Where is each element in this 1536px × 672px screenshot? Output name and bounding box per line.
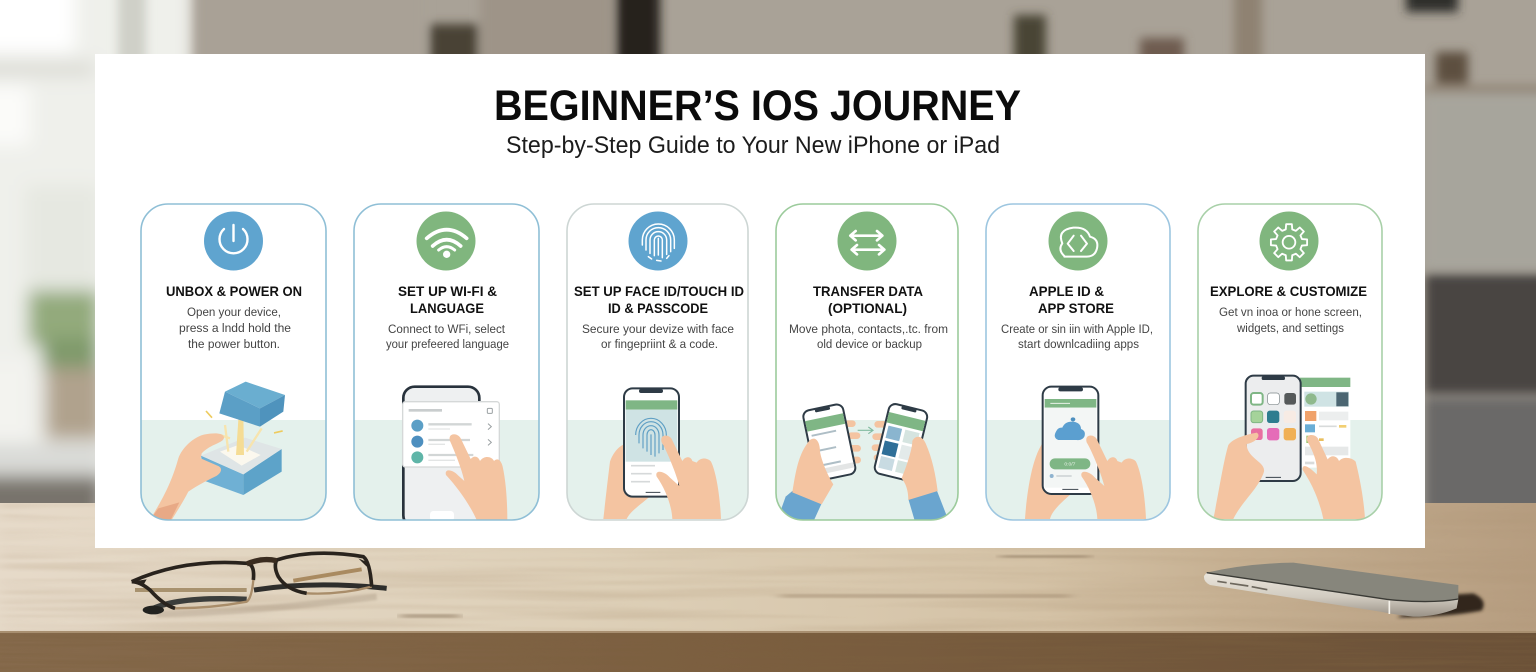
panel: step 3 face id and passcode xyxy=(567,204,748,520)
text: step 4 description xyxy=(789,322,948,351)
subtitle: Step-by-Step Guide to Your New iPhone or iPad xyxy=(506,132,1000,159)
icon: apple id cloud xyxy=(1048,212,1108,270)
panel: white guide board xyxy=(95,54,1425,548)
text: step 5 description: start downlcadiing apps xyxy=(1018,337,1139,351)
icon: smartphone lying on table xyxy=(1204,563,1484,617)
text: step 1 description: the power button. xyxy=(188,337,280,351)
heading: step 3 xyxy=(574,283,744,316)
text: step 2 description: Connect to WFi, select xyxy=(388,322,506,336)
icon: wi-fi xyxy=(416,212,476,270)
illustration: home screen and widgets xyxy=(1213,376,1365,519)
text: step 4 description: old device or backup xyxy=(817,337,922,351)
title: BEGINNER’S IOS JOURNEY xyxy=(494,82,1021,130)
heading: step 2 xyxy=(398,283,497,316)
icon: power xyxy=(204,212,263,270)
icon: eyeglasses on table xyxy=(132,553,387,614)
illustration: opening a box xyxy=(151,382,285,520)
text: step 6 description: widgets, and settings xyxy=(1236,321,1344,335)
heading: step 5: APP STORE xyxy=(1038,300,1114,316)
text: step 3 description: Secure your devize with face xyxy=(582,322,734,336)
text: step 5 description: Create or sin iin with Apple ID, xyxy=(1001,322,1153,336)
heading: step 5 xyxy=(1029,283,1114,316)
text: step 1 description xyxy=(179,305,291,351)
text: step 1 description: Open your device, xyxy=(187,305,281,319)
illustration: fingerprint on phone xyxy=(603,388,721,519)
text: step 6 description: Get vn inoa or hone screen, xyxy=(1219,305,1362,319)
panel: step 4 transfer data xyxy=(776,204,958,522)
text: step 3 description: or fingepriint & a code. xyxy=(601,337,718,351)
text: step 3 description xyxy=(582,322,734,351)
wooden table top xyxy=(0,503,1536,633)
heading: step 5: APPLE ID & xyxy=(1029,283,1104,299)
illustration: phone settings list xyxy=(403,387,507,527)
illustration: apple id sign in on phone: 0:0/7 xyxy=(1064,462,1076,468)
illustration: two phones transferring xyxy=(777,403,949,522)
heading: step 3: SET UP FACE ID/TOUCH ID xyxy=(574,283,744,299)
icon: transfer arrows xyxy=(838,212,896,270)
heading: step 6: EXPLORE & CUSTOMIZE xyxy=(1210,283,1367,299)
text: step 1 description: press a lndd hold the xyxy=(179,321,291,335)
icon: fingerprint xyxy=(628,212,688,270)
text: step 5 description xyxy=(1001,322,1153,351)
heading: step 4: (OPTIONAL) xyxy=(828,300,907,316)
table front edge xyxy=(0,631,1536,672)
heading: step 3: ID & PASSCODE xyxy=(608,300,708,316)
heading: step 2: SET UP WI-FI & xyxy=(398,283,497,299)
heading: step 4: TRANSFER DATA xyxy=(813,283,923,299)
text: step 2 description: your prefeered language xyxy=(386,337,509,351)
panel: step 1 unbox and power on xyxy=(141,204,326,520)
panel: step 2 wi-fi and language xyxy=(354,204,539,527)
text: step 2 description xyxy=(386,322,509,351)
heading: step 2: LANGUAGE xyxy=(410,300,484,316)
panel: step 6 explore and customize xyxy=(1198,204,1382,520)
panel: step 5 apple id and app store xyxy=(986,204,1170,520)
heading: step 1: UNBOX & POWER ON xyxy=(166,283,302,299)
text: step 6 description xyxy=(1219,305,1362,335)
illustration: apple id sign in on phone xyxy=(1025,387,1146,519)
text: step 4 description: Move phota, contacts,.tc. from xyxy=(789,322,948,336)
icon: gear xyxy=(1260,212,1318,270)
heading: step 4 xyxy=(813,283,923,316)
